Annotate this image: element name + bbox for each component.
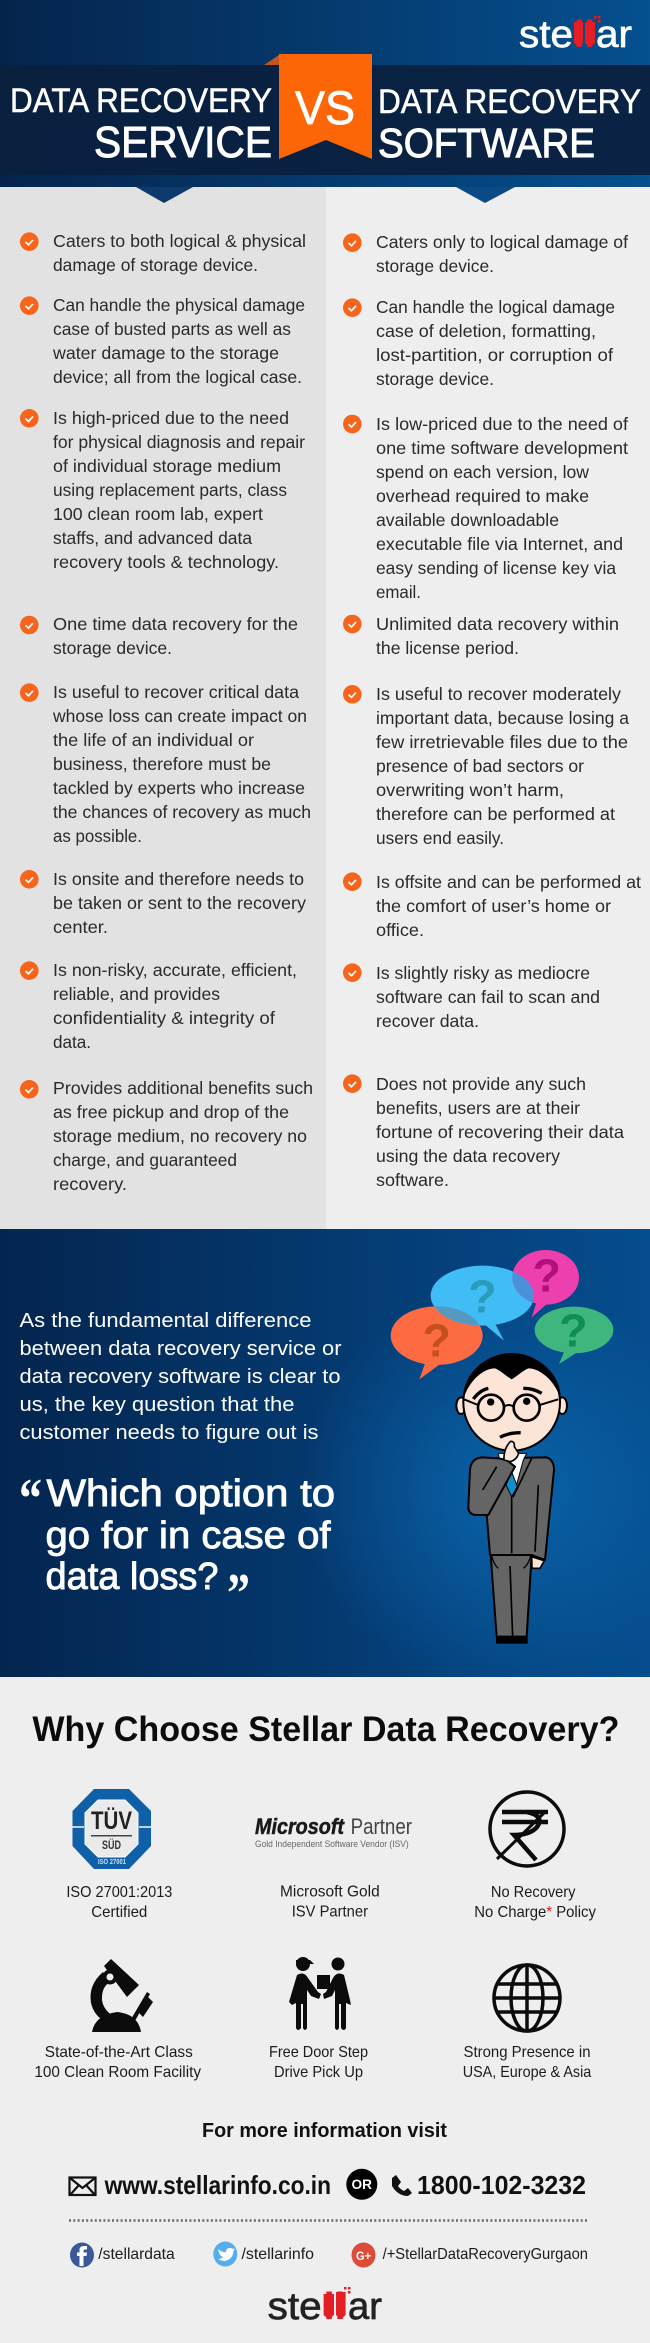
item: low priced xyxy=(343,414,628,602)
item: offsite xyxy=(343,872,641,940)
logo: stellar xyxy=(519,14,632,56)
head xyxy=(463,1354,560,1451)
item: onsite: be taken or sent to the recovery xyxy=(53,893,306,913)
social: google plus: G+ xyxy=(356,2249,371,2263)
intro text xyxy=(20,1310,342,1444)
footer: contact xyxy=(69,2119,588,2328)
feature: free pickup: Drive Pick Up xyxy=(274,2064,363,2081)
social: facebook: /stellardata xyxy=(98,2246,175,2263)
intro text: us, the key question that the xyxy=(20,1394,294,1416)
item: low priced: available downloadable xyxy=(376,510,559,530)
vs ribbon: VS xyxy=(295,81,355,134)
item: additional benefits: Provides additional benefits such xyxy=(53,1078,313,1098)
item: critical data: as possible. xyxy=(53,826,142,846)
face xyxy=(464,1388,558,1437)
item: physical damage xyxy=(20,295,305,387)
logo: microsoft partner xyxy=(255,1814,412,1850)
intro text: customer needs to figure out is xyxy=(20,1422,318,1444)
feature: clean room: State-of-the-Art Class xyxy=(45,2044,193,2061)
logo: microsoft partner: Partner xyxy=(351,1814,412,1839)
feature: clean room xyxy=(34,1959,201,2081)
item: logical only xyxy=(343,232,628,276)
phone number: 1800-102-3232 xyxy=(417,2170,586,2200)
social: google plus: /+StellarDataRecoveryGurgaon xyxy=(383,2246,588,2263)
item: physical damage: water damage to the storage xyxy=(52,343,279,363)
pointer: right column xyxy=(456,187,515,203)
item: logical damage case: case of deletion, formatting, xyxy=(376,321,596,341)
logo: microsoft partner: Gold Independent Software Vendor (ISV) xyxy=(255,1839,409,1850)
item: high priced: using replacement parts, class xyxy=(53,480,287,500)
item: logical only: Caters only to logical damage of xyxy=(376,232,628,252)
item: logical damage case: lost-partition, or corruption of xyxy=(376,345,613,365)
item: no such benefits: using the data recovery xyxy=(376,1146,560,1166)
heading: data recovery service xyxy=(10,82,272,167)
feature: no recovery no charge xyxy=(474,1792,596,1921)
item: slightly risky xyxy=(343,963,600,1031)
hair xyxy=(463,1353,561,1400)
item: moderately important data xyxy=(343,684,629,848)
heading: why choose stellar: Why Choose Stellar Data Recovery? xyxy=(32,1710,619,1749)
item: non-risky xyxy=(20,960,297,1052)
icon: crossed rupee xyxy=(490,1792,564,1866)
item: moderately important data: important data, because losing a xyxy=(376,708,629,728)
feature: microsoft partner: ISV Partner xyxy=(292,1904,369,1920)
item: slightly risky: Is slightly risky as mediocre xyxy=(376,963,590,983)
item: logical and physical: damage of storage device. xyxy=(53,255,258,275)
logo: stellar: ste xyxy=(519,14,573,56)
item: critical data: tackled by experts who increase xyxy=(53,778,305,798)
feature: microsoft partner xyxy=(255,1814,412,1920)
item: high priced: for physical diagnosis and repair xyxy=(53,432,305,452)
heading: data recovery service: SERVICE xyxy=(94,118,272,167)
item: additional benefits: as free pickup and drop of the xyxy=(53,1102,289,1122)
feature: global presence: Strong Presence in xyxy=(464,2044,590,2061)
feature: iso certified: ISO 27001:2013 xyxy=(66,1884,172,1901)
panel: right column software xyxy=(326,187,650,1229)
feature: global presence xyxy=(463,1965,591,2081)
item: critical data: Is useful to recover critical data xyxy=(53,682,299,702)
item: onsite: center. xyxy=(53,917,108,937)
item: additional benefits: charge, and guaranteed xyxy=(53,1150,237,1170)
speech bubbles: ? xyxy=(468,1270,497,1322)
quote: Which option to xyxy=(46,1473,335,1515)
heading: more information: For more information visit xyxy=(202,2119,447,2142)
item: low priced: email. xyxy=(376,582,421,602)
item: low priced: Is low-priced due to the need of xyxy=(376,414,628,434)
item: high priced: recovery tools & technology. xyxy=(53,552,279,572)
pointer: left column xyxy=(136,187,193,203)
item: no such benefits: Does not provide any such xyxy=(376,1074,586,1094)
item: non-risky: confidentiality & integrity of xyxy=(53,1008,275,1028)
item: non-risky: data. xyxy=(53,1032,91,1052)
item: low priced: overhead required to make xyxy=(376,486,589,506)
item: low priced: spend on each version, low xyxy=(376,462,589,482)
badge: or: OR xyxy=(352,2176,372,2192)
item: no such benefits xyxy=(343,1074,624,1190)
item: physical damage: case of busted parts as well as xyxy=(53,319,291,339)
item: moderately important data: Is useful to recover moderately xyxy=(376,684,621,704)
item: no such benefits: fortune of recovering their data xyxy=(376,1122,624,1142)
item: moderately important data: presence of bad sectors or xyxy=(376,756,584,776)
ears xyxy=(456,1397,466,1414)
item: unlimited recovery: the license period. xyxy=(376,638,519,658)
intro text: data recovery software is clear to xyxy=(20,1366,340,1388)
header banner xyxy=(0,0,650,187)
badge: or xyxy=(346,2169,377,2200)
title band xyxy=(0,65,650,175)
item: physical damage: device; all from the logical case. xyxy=(53,367,302,387)
item: moderately important data: users end easily. xyxy=(376,828,504,848)
item: one time recovery: storage device. xyxy=(53,638,172,658)
item: one time recovery: One time data recovery for the xyxy=(53,614,298,634)
intro text: between data recovery service or xyxy=(20,1338,342,1360)
item: logical damage case: Can handle the logical damage xyxy=(376,297,615,317)
shirt and tie xyxy=(498,1453,527,1497)
item: critical data: the life of an individual or xyxy=(53,730,254,750)
speech bubbles: ? xyxy=(532,1250,561,1302)
item: moderately important data: overwriting won’t harm, xyxy=(376,780,564,800)
feature: global presence: USA, Europe & Asia xyxy=(463,2064,591,2081)
logo: stellar footer: ste xyxy=(268,2286,322,2328)
item: physical damage: Can handle the physical damage xyxy=(53,295,305,315)
vs ribbon xyxy=(264,54,372,159)
heading: data recovery software xyxy=(378,83,641,166)
heading: data recovery software: SOFTWARE xyxy=(378,120,595,166)
item: offsite: the comfort of user’s home or xyxy=(376,896,611,916)
item: logical damage case: storage device. xyxy=(376,369,494,389)
item: logical and physical: Caters to both logical & physical xyxy=(53,231,306,251)
item: offsite: Is offsite and can be performed at xyxy=(376,872,641,892)
item: critical data: the chances of recovery as much xyxy=(53,802,311,822)
item: no such benefits: benefits, users are at their xyxy=(376,1098,580,1118)
quote: ” xyxy=(227,1563,250,1625)
quote: data loss? xyxy=(46,1556,218,1598)
speech bubbles xyxy=(391,1250,613,1379)
quote xyxy=(19,1468,335,1625)
feature: iso certified: Certified xyxy=(91,1904,147,1921)
feature: free pickup: Free Door Step xyxy=(269,2044,368,2061)
icon: globe xyxy=(494,1965,560,2031)
panel: key question xyxy=(0,1229,650,1677)
feature: microsoft partner: Microsoft Gold xyxy=(280,1884,380,1900)
feature: clean room: 100 Clean Room Facility xyxy=(34,2064,201,2081)
item: high priced xyxy=(20,408,305,572)
social: facebook xyxy=(70,2242,175,2268)
hand in pocket xyxy=(532,1557,544,1568)
quote: “ xyxy=(19,1468,42,1530)
item: critical data xyxy=(20,682,311,846)
item: moderately important data: therefore can be performed at xyxy=(376,804,615,824)
social: twitter: /stellarinfo xyxy=(242,2246,314,2263)
icon: tuv badge xyxy=(72,1789,151,1869)
item: critical data: whose loss can create impact on xyxy=(52,706,307,726)
item: high priced: of individual storage medium xyxy=(53,456,281,476)
logo: microsoft partner: Microsoft xyxy=(255,1814,346,1839)
social: twitter xyxy=(213,2242,314,2266)
social: google plus xyxy=(352,2242,588,2268)
icon: envelope xyxy=(70,2178,96,2195)
item: logical damage case xyxy=(343,297,615,389)
speech bubbles: ? xyxy=(422,1315,451,1367)
logo: stellar: ll xyxy=(574,14,595,56)
torso xyxy=(483,1457,554,1560)
icon: delivery handover xyxy=(289,1957,351,2030)
item: logical only: storage device. xyxy=(376,256,494,276)
logo: stellar: ar xyxy=(596,14,632,56)
item: non-risky: reliable, and provides xyxy=(53,984,220,1004)
item: no such benefits: software. xyxy=(376,1170,449,1190)
item: additional benefits: recovery. xyxy=(53,1174,127,1194)
item: low priced: easy sending of license key via xyxy=(376,558,616,578)
item: moderately important data: few irretrievable files due to the xyxy=(376,732,628,752)
item: offsite: office. xyxy=(376,920,424,940)
logo: stellar footer xyxy=(268,2286,382,2328)
item: low priced: one time software development xyxy=(376,438,628,458)
feature: iso certified xyxy=(66,1789,172,1921)
website: www.stellarinfo.co.in xyxy=(104,2170,331,2200)
item: high priced: 100 clean room lab, expert xyxy=(53,504,263,524)
item: unlimited recovery: Unlimited data recovery within xyxy=(376,614,619,634)
speech bubbles: ? xyxy=(559,1305,588,1357)
feature: free pickup xyxy=(269,1957,368,2081)
icon: tuv badge: TÜV xyxy=(91,1806,132,1835)
item: low priced: executable file via Internet, and xyxy=(376,534,623,554)
item: slightly risky: recover data. xyxy=(376,1011,479,1031)
arm raised xyxy=(468,1457,515,1515)
item: onsite xyxy=(20,869,306,937)
legs xyxy=(491,1555,532,1637)
item: unlimited recovery xyxy=(343,614,619,658)
icon: microscope xyxy=(90,1959,153,2032)
item: logical and physical xyxy=(20,231,306,275)
item: additional benefits xyxy=(20,1078,313,1194)
illustration: thinking man xyxy=(391,1250,613,1644)
logo: stellar footer: ar xyxy=(348,2286,382,2328)
icon: tuv badge: ISO 27001 xyxy=(98,1859,126,1866)
item: critical data: business, therefore must be xyxy=(53,754,271,774)
icon: phone xyxy=(392,2175,412,2196)
item: non-risky: Is non-risky, accurate, efficient, xyxy=(53,960,297,980)
heading: data recovery service: DATA RECOVERY xyxy=(10,82,272,120)
logo: stellar footer: ll xyxy=(324,2286,346,2328)
item: slightly risky: software can fail to scan and xyxy=(376,987,600,1007)
item: high priced: staffs, and advanced data xyxy=(53,528,252,548)
feature: no recovery no charge: No Charge* Policy xyxy=(474,1904,596,1921)
intro text: As the fundamental difference xyxy=(20,1310,312,1332)
item: high priced: Is high-priced due to the need xyxy=(53,408,289,428)
panel: left column service xyxy=(0,187,326,1229)
hand on chin xyxy=(504,1441,519,1462)
item: additional benefits: storage medium, no recovery no xyxy=(53,1126,307,1146)
icon: tuv badge: SÜD xyxy=(102,1837,121,1852)
item: one time recovery xyxy=(20,614,298,658)
item: onsite: Is onsite and therefore needs to xyxy=(53,869,304,889)
quote: go for in case of xyxy=(46,1515,331,1557)
feature: no recovery no charge: No Recovery xyxy=(491,1884,576,1901)
